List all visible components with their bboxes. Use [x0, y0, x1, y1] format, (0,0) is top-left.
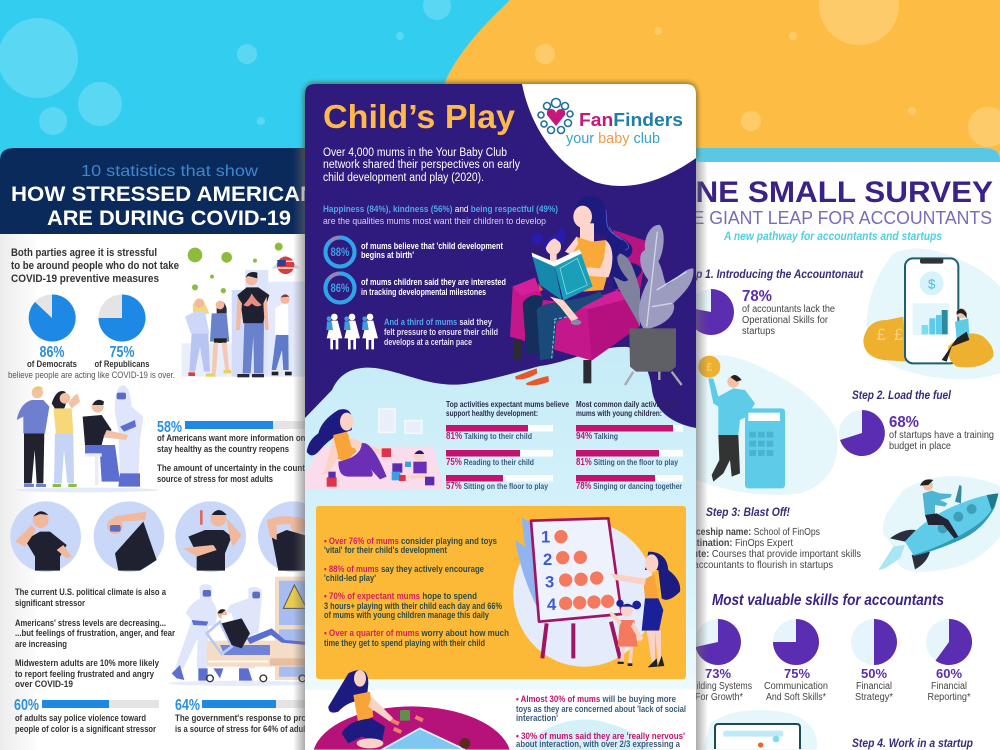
pie chart: 50% financial strategy: Strategy*	[855, 692, 893, 703]
chart: most common daily activities: 94% Talking	[576, 431, 618, 442]
text: play facts: 3 hours+ playing with their child each day and 66%	[324, 601, 503, 611]
text block: stress findings: to report feeling frustrated and angry	[15, 669, 155, 680]
step 1 heading: Step 1. Introducing the Accountonaut	[680, 269, 864, 281]
header band: HOW STRESSED AMERICANS	[11, 182, 331, 206]
step 2 heading: Step 2. Load the fuel	[852, 390, 952, 402]
stretcher bed	[207, 622, 307, 682]
pie chart: 73% building systems: Building Systems	[686, 681, 752, 692]
text: play facts	[324, 536, 509, 648]
book	[532, 249, 593, 301]
illustration: hospital stretcher	[168, 577, 309, 686]
illustration: phone and coins: $	[928, 276, 936, 291]
title: ONE SMALL SURVEY	[671, 176, 993, 209]
stat: 78% text	[742, 288, 835, 337]
logo: FanFinders wordmark: FanFinders	[579, 109, 683, 130]
figure: astronaut accountant	[920, 479, 962, 538]
icon: three mothers with babies	[326, 314, 378, 349]
pie chart: 75% communication	[764, 619, 828, 703]
pie chart: 75% communication: And Soft Skills*	[766, 692, 826, 703]
text: lower bullet points: toys as they are concerned about 'lack of social	[516, 703, 686, 714]
third of mums text	[384, 317, 498, 347]
figure: daughter	[532, 228, 581, 325]
intro text	[323, 147, 520, 184]
icon: man with fever	[175, 501, 246, 572]
intro text: Both parties agree it is stressful	[11, 247, 157, 259]
stat: 64% bar: The government's response to protests	[175, 713, 325, 724]
third of mums text: felt pressure to ensure their child	[384, 327, 498, 337]
figure: first medic	[172, 584, 217, 681]
text block: stress findings: over COVID-19	[15, 679, 73, 690]
toy blocks	[327, 448, 434, 487]
pie chart: 86% of Democrats	[27, 294, 77, 370]
title: Child’s Play	[323, 98, 516, 135]
text: play facts: 'vital' for their child's development	[324, 545, 447, 555]
text: lower bullet points	[516, 693, 686, 749]
chart: most common daily activities: 78% Singing or dancing together	[576, 481, 682, 492]
figure: two women	[185, 298, 231, 377]
text: play facts: 'child-led play'	[324, 573, 376, 583]
illustration: counting board with mum and girl: 4	[547, 595, 557, 614]
illustration: person on rocket	[878, 476, 1000, 572]
pie chart: 75% communication: 75%	[784, 666, 810, 681]
step 3 heading: Step 3: Blast Off!	[706, 507, 790, 519]
text block: stress findings: ...but feelings of frustration, anger, and fear	[15, 628, 175, 639]
stat: 60% bar	[14, 697, 159, 735]
intro text	[11, 247, 179, 285]
stat: 58% bar: 58%	[157, 419, 182, 436]
chart: most common daily activities: mums with young children:	[576, 408, 662, 418]
step 3 details	[696, 528, 861, 570]
pie chart: 75% of Republicans	[94, 294, 150, 370]
figure: sick group	[15, 385, 158, 492]
illustration: mum playing blocks with baby	[305, 409, 445, 490]
pie chart: 50% financial strategy: 50%	[861, 666, 887, 681]
stat: 64% bar	[175, 699, 305, 732]
ring stat: 88%: of mums believe that 'child development	[361, 241, 503, 251]
text: play facts: • 88% of mums say they actively encourage	[324, 564, 484, 574]
intro text: to be around people who do not take	[11, 260, 179, 272]
illustration: phone and coins	[863, 248, 1000, 379]
step 4 heading: Step 4. Work in a startup	[852, 738, 973, 750]
pie chart: 75% communication: Communication	[764, 681, 828, 692]
heading: most valuable skills: Most valuable skills for accountants	[712, 592, 944, 609]
stat: 58% bar: stay healthy as the country reopens	[157, 444, 289, 455]
stat: 68% text	[889, 414, 994, 452]
ring stat: 88%: begins at birth'	[361, 250, 414, 260]
chart: most common daily activities: 81% Sitting on the floor to play	[576, 457, 678, 468]
pie chart: 50% financial strategy: Financial	[856, 681, 892, 692]
qualities text	[323, 204, 558, 226]
stat: 58% bar: The amount of uncertainty in the country is a	[157, 463, 329, 474]
stat: 68% text: 68%	[889, 414, 919, 431]
figure: central man	[236, 272, 269, 377]
text block: stress findings: significant stressor	[15, 598, 85, 609]
ring stat: 86%: 86%	[330, 283, 350, 295]
figure: mum	[515, 206, 612, 385]
chart: activities expectant mums believe: 75% Reading to their child	[446, 457, 534, 468]
pie chart: 50% financial strategy	[851, 619, 897, 703]
text: lower bullet points: • Almost 30% of mums will be buying more	[516, 693, 676, 704]
step 3 details: Destination: FinOps Expert	[680, 538, 793, 549]
chart: activities expectant mums believe: support healthy development:	[446, 408, 538, 418]
illustration: laptop	[703, 710, 817, 750]
illustration: crowd and capitol with viruses	[15, 243, 307, 492]
pie chart: 60% financial reporting: Financial	[931, 681, 967, 692]
intro text: COVID-19 preventive measures	[11, 273, 159, 285]
illustration: counting board with mum and girl	[513, 517, 680, 667]
title	[696, 181, 992, 242]
icon: man holding head	[258, 501, 305, 572]
illustration: counting board with mum and girl: 2	[543, 550, 552, 569]
stat: 68% text: budget in place	[889, 441, 951, 452]
illustration: mum reading with daughter on chair	[510, 196, 693, 385]
stat: 64% bar: 64%	[175, 697, 200, 714]
stat: 78% text: Operational Skills for	[742, 315, 829, 326]
text: play facts: of mums with young children manage this daily	[324, 610, 490, 620]
pie chart: 68%	[839, 410, 885, 456]
illustration: phone and coins: £	[894, 325, 903, 344]
text block: stress findings: Americans' stress levels are decreasing...	[15, 618, 166, 629]
panel: one small survey (right infographic)	[666, 148, 1000, 750]
figure: girl	[610, 600, 643, 666]
pie chart: 86% of Democrats: of Democrats	[27, 359, 77, 370]
stat: 58% bar: source of stress for most adults	[157, 474, 273, 485]
pie chart: 78%	[696, 289, 734, 335]
header band: 10 statistics that show	[81, 163, 259, 180]
figure: patient	[217, 609, 307, 648]
step 3 details: for accountants to flourish in startups	[680, 560, 833, 571]
panel: how stressed Americans (left infographic)	[0, 148, 333, 750]
illustration: counting board with mum and girl: 3	[545, 573, 554, 592]
intro text: network shared their perspectives on early	[323, 159, 520, 171]
chart: activities expectant mums believe	[446, 399, 569, 492]
illustration: man with calculator	[696, 355, 838, 495]
intro text: child development and play (2020).	[323, 172, 484, 184]
text: play facts: • 70% of expectant mums hope to spend	[324, 591, 477, 601]
chair back	[613, 230, 648, 290]
qualities text: are the qualities mums most want their children to develop	[323, 216, 546, 226]
intro text: Over 4,000 mums in the Your Baby Club	[323, 147, 507, 159]
figure: second medic	[213, 587, 262, 681]
third of mums text: develops at a certain pace	[384, 337, 472, 347]
stat: 60% bar: 60%	[14, 697, 39, 714]
illustration: phone and coins: £	[877, 325, 886, 344]
text: play facts: • Over a quarter of mums worry about how much	[324, 628, 509, 638]
text: lower bullet points: about interaction, with over 2/3 expressing a	[516, 738, 681, 749]
illustration: man with calculator: £	[706, 362, 712, 374]
stat: 78% text: 78%	[742, 288, 772, 305]
title: A new pathway for accountants and startups	[723, 229, 942, 243]
third of mums text: And a third of mums said they	[384, 317, 492, 327]
header band	[0, 148, 331, 234]
pie chart: 86% of Democrats: 86%	[40, 344, 64, 361]
light blue wave section	[305, 347, 696, 690]
pie chart: 73% building systems: 73%	[705, 666, 731, 681]
qualities text: Happiness (84%), kindness (56%) and being respectful (49%)	[323, 204, 558, 214]
text block: stress findings	[15, 587, 175, 690]
stat: 60% bar: people of color is a significant stressor	[15, 724, 156, 735]
chart: most common daily activities: Most common daily activities for	[576, 399, 681, 409]
plant	[613, 225, 693, 328]
illustration: mum playing board game	[314, 670, 510, 750]
chart: most common daily activities	[576, 399, 683, 492]
pie chart: 60% financial reporting: Reporting*	[928, 692, 971, 703]
figure: teaching mum	[610, 552, 680, 667]
centre panel shadows	[293, 82, 708, 750]
text: play facts: • Over 76% of mums consider playing and toys	[324, 536, 497, 546]
pot	[625, 328, 682, 385]
stat: 78% text: startups	[742, 326, 775, 337]
pie chart: 75% of Republicans: of Republicans	[94, 359, 150, 370]
text block: stress findings: are increasing	[15, 639, 67, 650]
illustration: counting board with mum and girl: 1	[541, 527, 550, 546]
stat: 78% text: of accountants lack the	[742, 304, 835, 315]
text: lower bullet points: interaction'	[516, 712, 558, 723]
chart: activities expectant mums believe: 57% Sitting on the floor to play	[446, 481, 548, 492]
step 3 details: Route: Courses that provide important skills	[680, 549, 861, 560]
logo corner	[522, 84, 696, 186]
pie chart: 73% building systems: For Growth*	[695, 692, 743, 703]
pie chart: 60% financial reporting	[926, 619, 972, 703]
chart: activities expectant mums believe: 81% Talking to their child	[446, 431, 532, 442]
hair	[575, 196, 642, 290]
ring stat: 88%: 88%	[330, 247, 350, 259]
pie chart: 60% financial reporting: 60%	[936, 666, 962, 681]
icon: coughing man	[10, 501, 81, 572]
pie chart: 73% building systems	[686, 619, 752, 703]
ring stat: 86%: in tracking developmental milestones	[361, 287, 486, 297]
ring stat: 88%	[326, 238, 503, 266]
symptom icons row	[10, 501, 329, 572]
text block: stress findings: The current U.S. political climate is also a	[15, 587, 167, 598]
logo: your baby club: your baby club	[566, 130, 660, 147]
stat: 64% bar: is a source of stress for 64% of adults	[175, 724, 312, 735]
step 3 details: Spaceship name: School of FinOps	[680, 527, 820, 538]
light blob behind lower text	[520, 719, 655, 750]
stat: 60% bar: of adults say police violence toward	[15, 713, 146, 724]
stat: 58% bar	[157, 421, 305, 482]
logo: bubble heart	[538, 98, 573, 134]
pie caption: believe people are acting like COVID-19 is over.	[8, 369, 175, 380]
ring stat: 86%: of mums children said they are interested	[361, 277, 506, 287]
icon: man with headache	[94, 501, 164, 572]
title: ONE GIANT LEAP FOR ACCOUNTANTS	[666, 208, 992, 228]
ring stat: 86%	[326, 274, 506, 302]
text: lower bullet points: • 30% of mums said they are 'really nervous'	[516, 730, 685, 741]
figure: mum	[307, 409, 387, 479]
chair	[510, 278, 639, 383]
chart: activities expectant mums believe: Top activities expectant mums believe	[446, 399, 569, 409]
pie chart: 75% of Republicans: 75%	[110, 344, 134, 361]
figure: baby	[405, 450, 427, 478]
panel: Child's Play (centre infographic)	[305, 84, 696, 750]
text: play facts: time they get to spend playing with their child	[324, 638, 485, 648]
panel: yellow play facts	[316, 506, 686, 679]
header band: ARE DURING COVID-19	[47, 206, 291, 230]
stat: 58% bar: of Americans want more information on how to	[157, 433, 333, 444]
text block: stress findings: Midwestern adults are 10% more likely	[15, 658, 160, 669]
figure: right man with mask	[272, 294, 292, 375]
